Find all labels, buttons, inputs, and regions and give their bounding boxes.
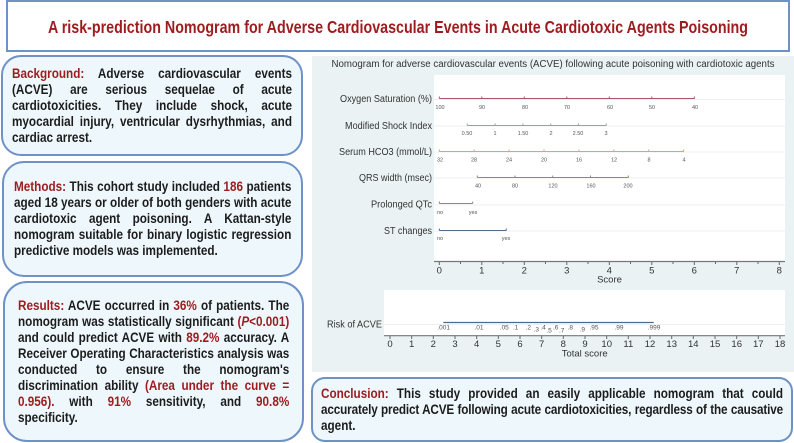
row: QRS width: 40 bbox=[475, 184, 481, 190]
row: risk of ACVE: .999 bbox=[648, 324, 661, 332]
total score axis: 9 bbox=[582, 339, 588, 350]
row: prolonged QTc: no bbox=[437, 210, 443, 216]
row: ST changes bbox=[384, 226, 511, 242]
total score axis: 17 bbox=[753, 339, 764, 350]
conclusion text: Conclusion: This study provided an easily applicable nomogram that could bbox=[321, 386, 783, 401]
row: risk of ACVE: .95 bbox=[589, 324, 599, 332]
row: modified shock index: 2.50 bbox=[573, 131, 583, 137]
results text: Results: ACVE occurred in 36% of patients. The bbox=[18, 298, 289, 313]
background text: (ACVE) are serious sequelae of acute bbox=[12, 82, 292, 97]
row: serum HCO3: 8 bbox=[647, 158, 651, 164]
row: prolonged QTc bbox=[371, 200, 478, 216]
background text bbox=[12, 66, 292, 145]
chart title: Nomogram for adverse cardiovascular events (ACVE) following acute poisoning with cardiotoxic agents bbox=[332, 59, 775, 70]
row: serum HCO3: 20 bbox=[541, 158, 547, 164]
total score axis: 7 bbox=[539, 339, 544, 350]
panel: background bbox=[1, 55, 303, 156]
row: serum HCO3: 12 bbox=[611, 158, 617, 164]
row: prolonged QTc: Prolonged QTc bbox=[371, 200, 432, 210]
score axis: 1 bbox=[479, 266, 484, 276]
row: QRS width: 200 bbox=[623, 184, 633, 190]
results text: discrimination ability (Area under the curve = bbox=[18, 378, 289, 393]
row: risk of ACVE: .9 bbox=[580, 326, 585, 334]
row: risk of ACVE: .1 bbox=[513, 324, 519, 332]
panel: conclusion bbox=[311, 377, 793, 442]
row: modified shock index: 1 bbox=[493, 131, 497, 137]
row: QRS width bbox=[359, 173, 633, 190]
row: serum HCO3: 24 bbox=[506, 158, 512, 164]
total score axis: 6 bbox=[517, 339, 523, 350]
row: modified shock index: 2 bbox=[549, 131, 553, 137]
results text: and could predict ACVE with 89.2% accuracy. A bbox=[18, 330, 289, 345]
row: oxygen saturation: 60 bbox=[607, 105, 613, 111]
row: oxygen saturation: 100 bbox=[435, 105, 445, 111]
results text: Receiver Operating Characteristics analysis was bbox=[18, 346, 289, 361]
row: QRS width: 120 bbox=[548, 184, 558, 190]
methods text: cardiotoxic agent poisoning. A Kattan-style bbox=[14, 211, 291, 226]
score axis: 8 bbox=[777, 266, 782, 276]
methods text: nomogram suitable for binary logistic regression bbox=[14, 227, 291, 242]
row: modified shock index bbox=[345, 121, 608, 137]
row: oxygen saturation: 40 bbox=[692, 105, 698, 111]
row: serum HCO3: 4 bbox=[682, 158, 686, 164]
row: QRS width: QRS width (msec) bbox=[359, 173, 432, 184]
row: serum HCO3 bbox=[339, 147, 686, 164]
score axis: 0 bbox=[437, 266, 442, 276]
conclusion text bbox=[321, 386, 783, 433]
score axis: 2 bbox=[522, 266, 527, 276]
total score axis: 12 bbox=[645, 339, 655, 350]
background text: myocardial injury, ventricular dysrhythmias, and bbox=[12, 114, 292, 129]
conclusion text: agent. bbox=[321, 418, 356, 433]
score axis: 4 bbox=[607, 266, 612, 276]
total score axis: 1 bbox=[409, 339, 414, 350]
row: modified shock index: Modified Shock Index bbox=[345, 121, 432, 132]
total score axis: 10 bbox=[601, 339, 612, 350]
background text: cardiotoxicities. They include shock, acute bbox=[12, 98, 292, 113]
row: QRS width: 80 bbox=[512, 184, 518, 190]
total score axis: 15 bbox=[710, 339, 720, 350]
row: risk of ACVE: .001 bbox=[437, 324, 450, 332]
row: risk of ACVE: .99 bbox=[614, 324, 624, 332]
row: ST changes: yes bbox=[502, 236, 511, 242]
score axis: 5 bbox=[649, 266, 654, 276]
row: risk of ACVE: .7 bbox=[559, 328, 565, 334]
row: oxygen saturation: Oxygen Saturation (%) bbox=[340, 94, 432, 105]
row: serum HCO3: Serum HCO3 (mmol/L) bbox=[339, 147, 432, 158]
row: oxygen saturation: 80 bbox=[522, 105, 528, 111]
methods text: predictive models was implemented. bbox=[14, 243, 218, 258]
panel: results bbox=[3, 281, 304, 442]
score axis: 6 bbox=[692, 266, 697, 276]
row: oxygen saturation: 50 bbox=[649, 105, 655, 111]
row: risk of ACVE bbox=[327, 320, 661, 334]
total score axis: 2 bbox=[431, 339, 436, 350]
panel: methods bbox=[2, 161, 303, 277]
total score axis: 11 bbox=[623, 339, 633, 350]
total score axis: Total score bbox=[562, 348, 608, 360]
row: serum HCO3: 16 bbox=[576, 158, 582, 164]
total score axis: 8 bbox=[561, 339, 566, 350]
methods text: Methods: This cohort study included 186 patients bbox=[14, 179, 291, 194]
score axis bbox=[434, 262, 785, 286]
row: risk of ACVE: .8 bbox=[568, 324, 573, 332]
title bbox=[6, 0, 790, 52]
row: risk of ACVE: .6 bbox=[553, 324, 559, 332]
row: risk of ACVE: .5 bbox=[546, 328, 552, 334]
background text: Background: Adverse cardiovascular events bbox=[12, 66, 292, 81]
total score axis bbox=[384, 336, 785, 360]
results text: nomogram was statistically significant (P<0.001) bbox=[18, 314, 289, 329]
row: risk of ACVE: .05 bbox=[500, 324, 509, 332]
conclusion text: accurately predict ACVE following acute cardiotoxicities, regardless of the causative bbox=[321, 402, 783, 417]
score axis: Score bbox=[597, 274, 622, 286]
background text: cardiac arrest. bbox=[12, 130, 92, 145]
row: oxygen saturation: 70 bbox=[564, 105, 570, 111]
row: risk of ACVE: Risk of ACVE bbox=[327, 320, 382, 330]
row: modified shock index: 3 bbox=[604, 131, 608, 137]
row: oxygen saturation: 90 bbox=[479, 105, 485, 111]
results text: specificity. bbox=[18, 410, 78, 425]
total score axis: 14 bbox=[688, 339, 699, 350]
methods text bbox=[14, 179, 291, 258]
row: risk of ACVE: .01 bbox=[474, 324, 484, 332]
total score axis: 16 bbox=[731, 339, 742, 350]
total score axis: 3 bbox=[452, 339, 458, 350]
row: serum HCO3: 32 bbox=[437, 158, 443, 164]
row: modified shock index: 0.50 bbox=[462, 131, 472, 137]
row: serum HCO3: 28 bbox=[471, 158, 477, 164]
total score axis: 5 bbox=[496, 339, 501, 350]
row: QRS width: 160 bbox=[586, 184, 596, 190]
score axis: 3 bbox=[564, 266, 569, 276]
total score axis: 13 bbox=[666, 339, 677, 350]
total score axis: 0 bbox=[387, 339, 393, 350]
total score axis: 4 bbox=[474, 339, 479, 350]
row: risk of ACVE: .4 bbox=[540, 324, 546, 332]
row: oxygen saturation bbox=[340, 94, 698, 111]
results text: 0.956). with 91% sensitivity, and 90.8% bbox=[18, 394, 289, 409]
row: risk of ACVE: .3 bbox=[534, 326, 539, 334]
methods text: aged 18 years or older of both genders with acute bbox=[14, 195, 291, 210]
total score axis: 18 bbox=[775, 339, 785, 350]
row: modified shock index: 1.50 bbox=[518, 131, 528, 137]
row: ST changes: ST changes bbox=[384, 226, 432, 237]
row: ST changes: no bbox=[437, 236, 443, 242]
results text bbox=[18, 298, 289, 425]
row: risk of ACVE: .2 bbox=[526, 324, 531, 332]
results text: conducted to ensure the nomogram's bbox=[18, 362, 289, 377]
score axis: 7 bbox=[734, 266, 739, 276]
row: prolonged QTc: yes bbox=[469, 210, 478, 216]
